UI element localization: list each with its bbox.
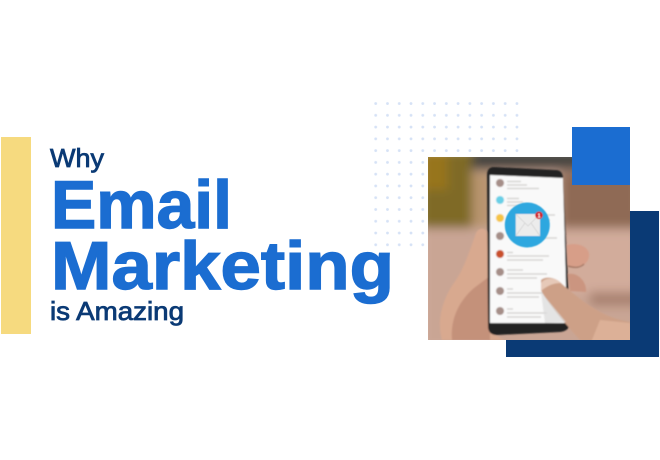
photo: hand holding phone	[428, 157, 630, 340]
heading line: Marketing: Marketing	[51, 228, 394, 304]
phone body	[487, 167, 570, 335]
yellow accent bar	[1, 137, 31, 334]
fingers behind phone	[567, 244, 589, 267]
thumb shadow on screen	[541, 292, 566, 323]
mail notification icon	[505, 202, 550, 248]
left hand	[440, 229, 505, 340]
heading line: Email: Email	[51, 167, 232, 243]
notification badge	[535, 212, 543, 219]
blurred background	[428, 157, 630, 340]
navy square	[506, 211, 659, 357]
blue square	[572, 127, 630, 185]
dot grid	[370, 98, 523, 251]
infographic canvas	[1, 102, 659, 357]
title	[50, 143, 394, 326]
envelope	[516, 214, 540, 236]
mail notification icon: 1	[537, 213, 541, 219]
email rows	[496, 179, 557, 317]
heading line: is Amazing: is Amazing	[50, 296, 184, 326]
phone screen	[490, 175, 567, 323]
right index finger	[540, 276, 626, 340]
heading line: Why: Why	[50, 143, 104, 173]
